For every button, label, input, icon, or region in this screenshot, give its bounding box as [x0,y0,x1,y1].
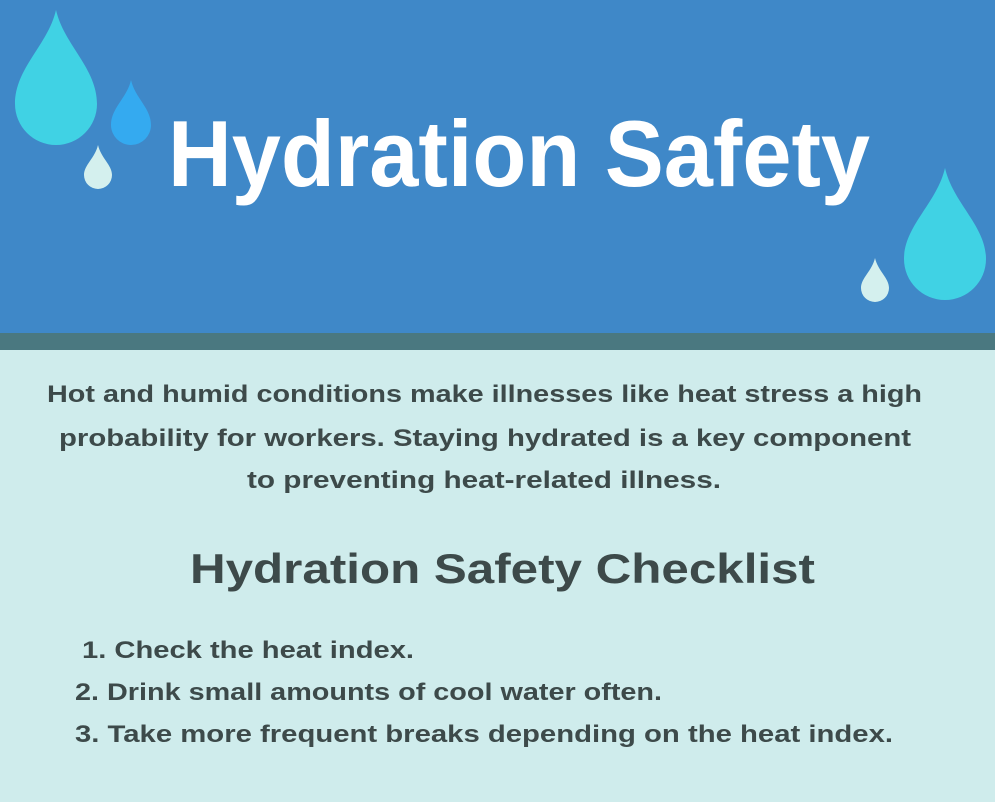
title: Hydration Safety [168,101,870,206]
icon: pale drop right [861,258,889,302]
icon: small blue drop [111,80,151,145]
body panel [0,350,995,802]
intro paragraph: to preventing heat-related illness. [247,467,721,494]
checklist items [75,637,893,748]
intro paragraph [47,381,922,494]
icon: pale drop left [84,145,112,189]
checklist heading: Hydration Safety Checklist [190,545,815,592]
checklist items: 1. Check the heat index. [82,637,414,664]
intro paragraph: probability for workers. Staying hydrated is a key component [59,425,911,452]
checklist items: 2. Drink small amounts of cool water often. [75,679,662,706]
divider band [0,333,995,350]
icon: large drop right [904,168,986,300]
header panel [0,0,995,333]
icon: large drop top-left [15,10,97,145]
intro paragraph: Hot and humid conditions make illnesses like heat stress a high [47,381,922,408]
checklist items: 3. Take more frequent breaks depending on the heat index. [75,721,893,748]
